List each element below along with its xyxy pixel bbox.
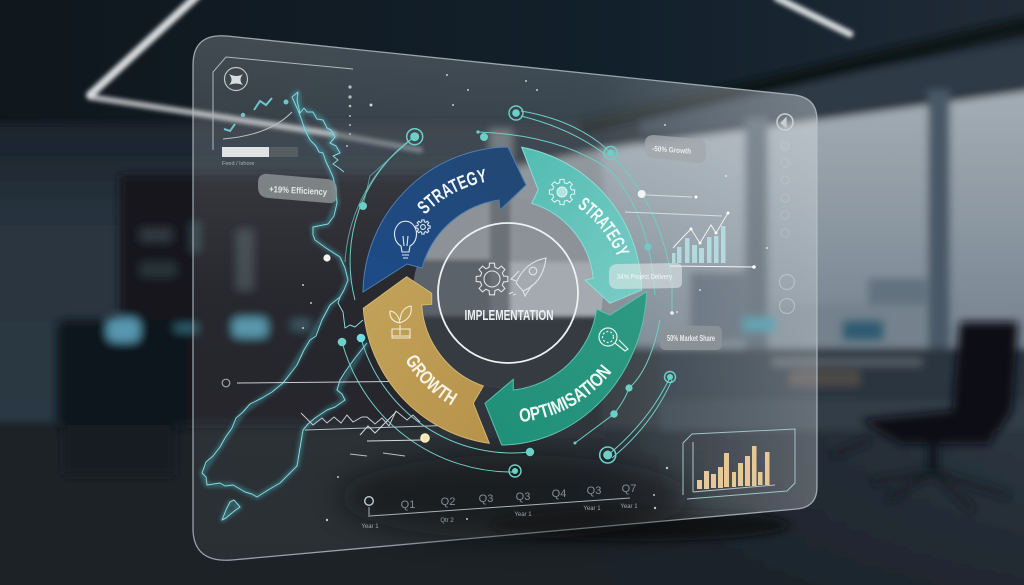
timeline: Q7 <box>622 483 636 495</box>
pill: efficiency <box>258 174 337 203</box>
timeline: Q3 <box>587 485 601 497</box>
right bar and line chart <box>625 195 756 315</box>
timeline: Q3 <box>479 493 493 505</box>
pill: growth <box>645 135 706 163</box>
progress bar <box>222 147 298 157</box>
right chair <box>950 322 1018 445</box>
timeline: Year 1 <box>583 506 601 512</box>
dark table reflection <box>490 509 790 541</box>
timeline <box>361 483 638 530</box>
timeline: Year 1 <box>514 512 532 518</box>
left crosshair lines and sparkline <box>222 379 460 456</box>
pill: efficiency faded <box>609 263 682 289</box>
icon: gear and rocket <box>476 258 546 296</box>
left chair <box>57 320 187 428</box>
ceiling light <box>90 0 850 150</box>
centre backdrop <box>414 201 603 388</box>
icon: seedling <box>390 306 411 338</box>
pill: efficiency faded: 34% Project Delivery <box>617 274 672 281</box>
segment: strategy teal <box>521 146 642 304</box>
caption: Feed / Ishore <box>222 161 254 167</box>
icon: gear <box>549 179 575 205</box>
map: New Zealand outline <box>202 92 367 520</box>
timeline: Q1 <box>401 499 415 511</box>
far wall <box>0 123 640 428</box>
segment: optimisation green <box>484 291 648 446</box>
pill: market share <box>660 325 722 350</box>
dotted legend <box>346 85 372 147</box>
icon: magnifier <box>599 328 628 351</box>
top-left data widget <box>213 57 353 167</box>
label: IMPLEMENTATION <box>464 307 554 324</box>
right-edge icon column <box>777 114 794 314</box>
centre circle <box>438 223 578 363</box>
trend sparkline <box>223 98 292 139</box>
timeline: Q2 <box>441 496 455 508</box>
glass panel <box>193 36 817 560</box>
label: GROWTH <box>406 355 458 406</box>
timeline: Qtr 2 <box>440 518 454 524</box>
label: STRATEGY <box>418 168 485 214</box>
pill: market share: 50% Market Share <box>667 334 715 343</box>
scattered light particles <box>302 74 768 521</box>
bottom-right bar chart <box>683 429 795 499</box>
icon: light bulb and gear <box>395 220 430 258</box>
timeline: Year 1 <box>361 524 379 530</box>
label: STRATEGY <box>578 198 630 255</box>
timeline: Q4 <box>552 488 566 500</box>
pill: growth: -50% Growth <box>652 144 692 156</box>
shelving <box>120 175 440 425</box>
timeline: Q3 <box>516 491 530 503</box>
segment: strategy blue <box>362 146 526 293</box>
label: OPTIMISATION <box>520 364 612 422</box>
icon: globe <box>224 68 248 90</box>
pill: efficiency: +19% Efficiency <box>269 184 327 197</box>
cycle diagram <box>362 146 648 446</box>
timeline: Year 1 <box>620 504 638 510</box>
segment: growth gold <box>362 276 490 444</box>
right monitors <box>843 321 883 340</box>
orbit rings and connector lines <box>342 111 672 472</box>
connector nodes <box>323 106 676 477</box>
